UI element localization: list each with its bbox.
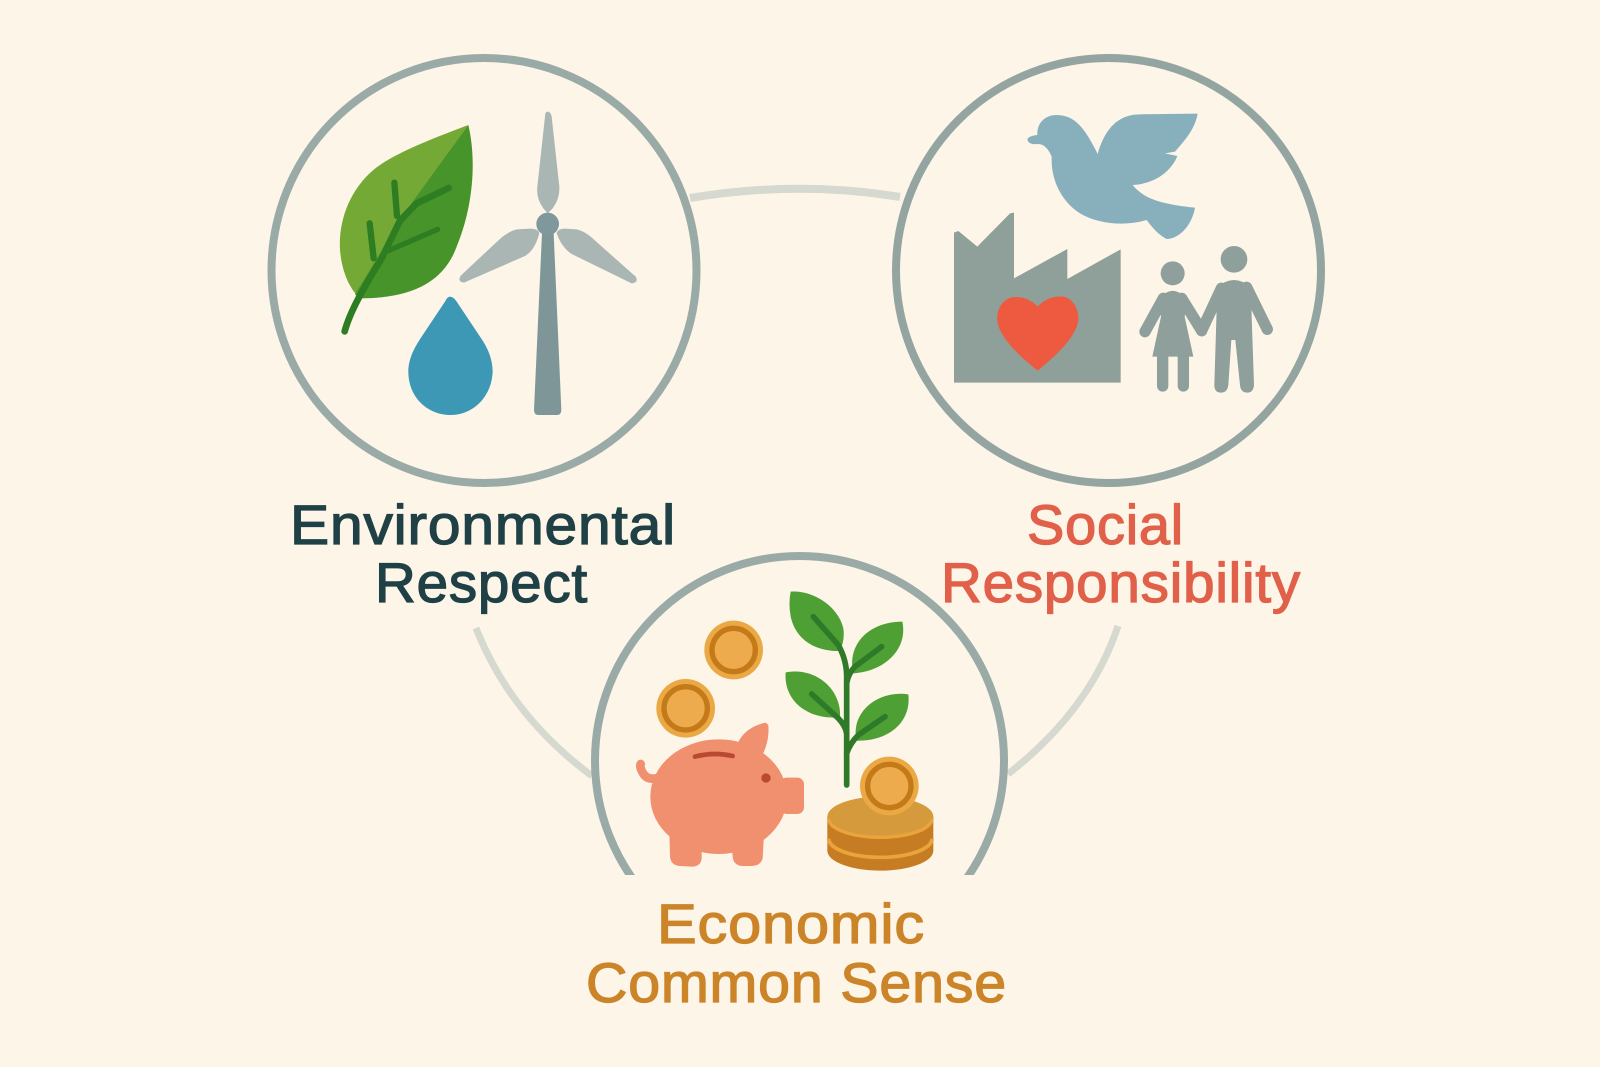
heading: Environmental Respect <box>290 493 676 614</box>
heading: Social Responsibility <box>941 493 1301 614</box>
icon: falling coin 1 <box>704 621 763 679</box>
icon: water drop <box>408 297 493 415</box>
icon: factory <box>954 213 1121 383</box>
icon: woman <box>1145 261 1202 386</box>
icon: dove <box>1027 114 1198 239</box>
icons: dove, factory and people <box>954 114 1267 393</box>
icons: leaf, water drop and wind turbine <box>340 112 637 415</box>
icon: leaf <box>340 125 473 331</box>
icon: wind turbine <box>459 112 637 415</box>
infographic: three pillars diagram <box>268 54 1325 1004</box>
heading: Environmental Respect: Environmental <box>290 493 676 556</box>
circle: social <box>896 58 1321 483</box>
icon: heart <box>997 297 1078 371</box>
heading: Economic Common Sense: Economic <box>657 892 925 955</box>
icon: plant <box>786 592 909 785</box>
heading: Environmental Respect: Respect <box>375 551 588 614</box>
circle: environmental <box>272 58 696 483</box>
icon: falling coin 2 <box>656 679 715 738</box>
icons: coins, piggy bank and plant <box>640 592 933 871</box>
icon: coin stack <box>827 797 933 871</box>
icon: coin on stack <box>860 757 919 815</box>
connector: social to economic <box>1008 626 1118 774</box>
circle: economic, open at the bottom <box>591 552 1008 875</box>
icon: piggy bank <box>640 723 804 867</box>
heading: Economic Common Sense <box>586 892 1007 1014</box>
panel: economic common sense <box>591 552 1008 875</box>
panel: environmental respect <box>272 58 696 483</box>
heading: Social Responsibility: Responsibility <box>941 551 1301 614</box>
heading: Social Responsibility: Social <box>1027 493 1184 556</box>
icon: man <box>1202 246 1267 393</box>
heading: Economic Common Sense: Common Sense <box>586 951 1007 1014</box>
connector: environment to economic <box>476 628 592 776</box>
connector: environment to social <box>690 189 900 198</box>
panel: social responsibility <box>896 58 1321 483</box>
